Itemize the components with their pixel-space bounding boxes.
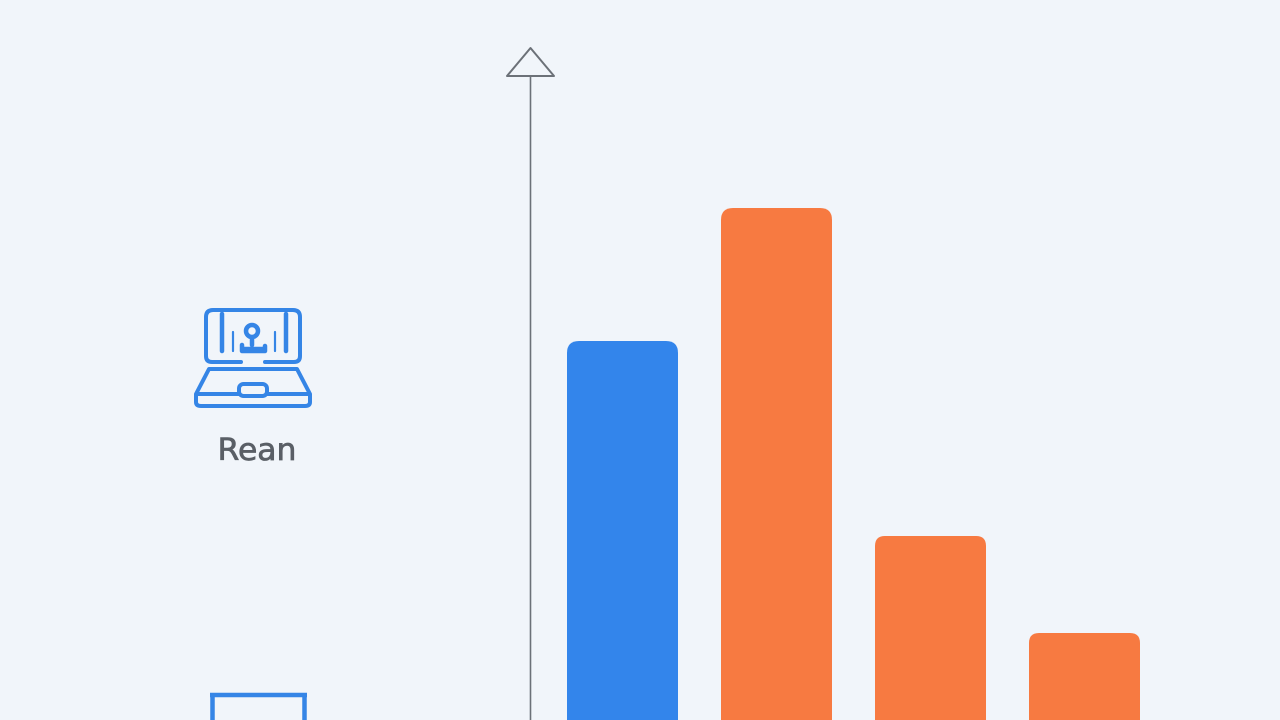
chart: vertical axis with triangular arrowhead [507, 48, 554, 720]
bar 2: orange, tallest [721, 208, 832, 720]
bar 1: blue [567, 341, 678, 720]
bar 4: orange, shortest [1029, 633, 1140, 720]
icon: second blue outlined shape, cropped at the bottom edge [210, 695, 307, 720]
label: Rean: Rean [218, 433, 296, 468]
bar 3: orange [875, 536, 986, 720]
icon: laptop with user on screen [196, 310, 310, 406]
bar chart [567, 208, 1140, 720]
